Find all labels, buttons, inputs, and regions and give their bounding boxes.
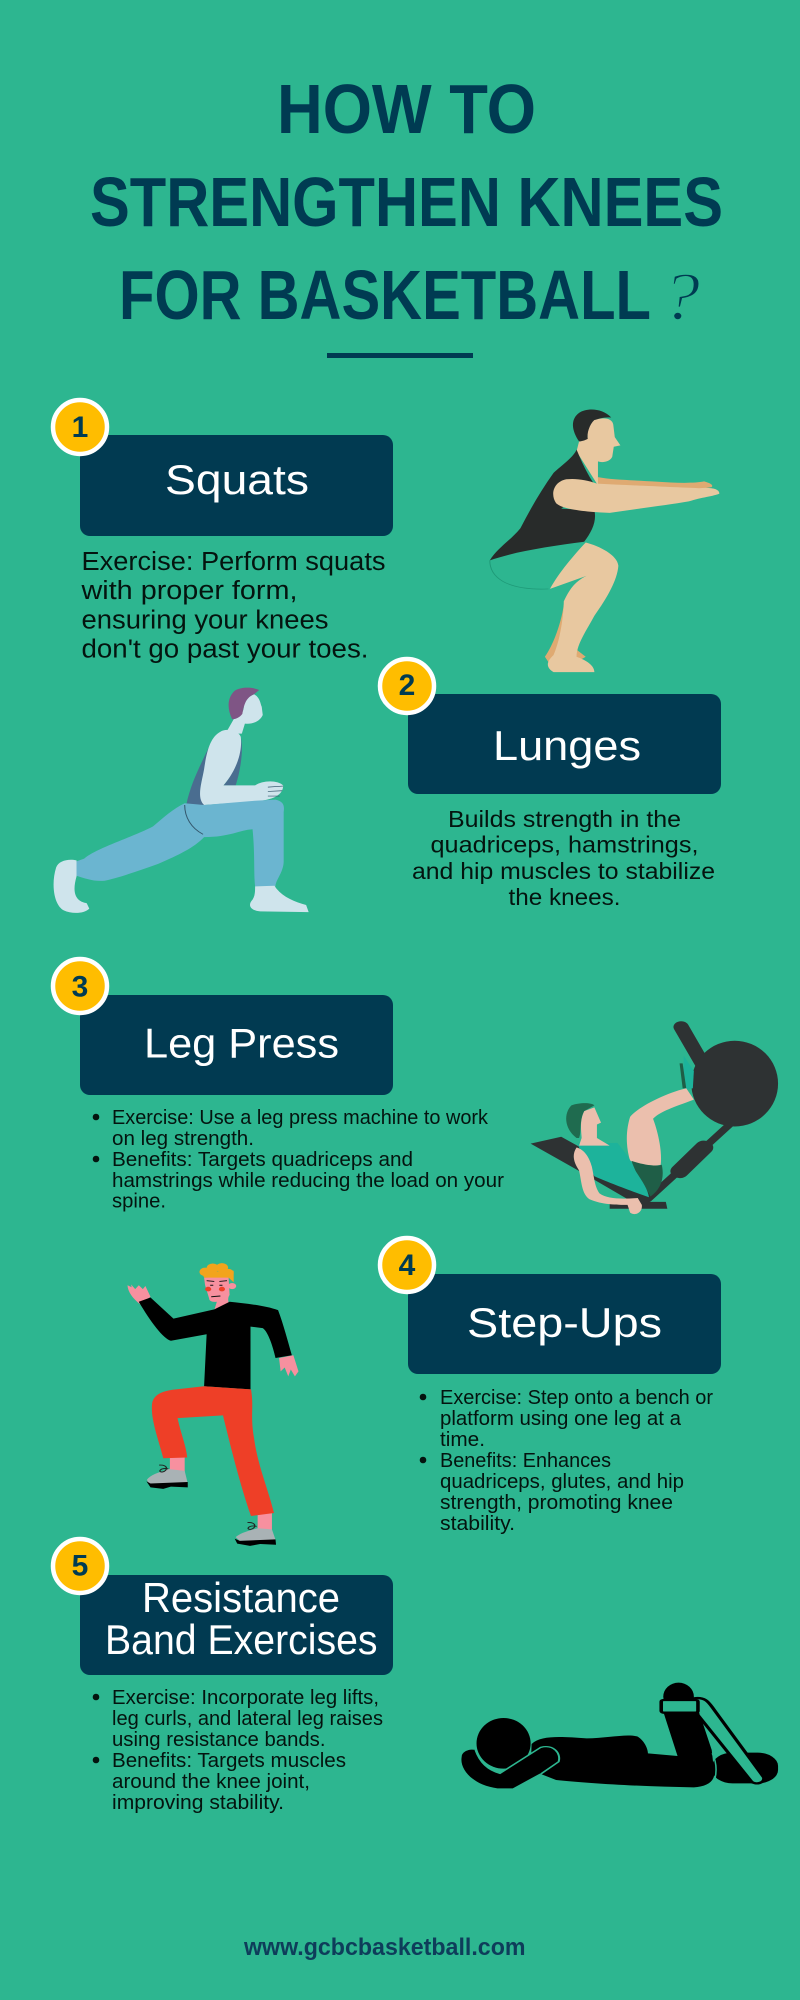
list: leg press details: Exercise: Use a leg press machine to work [112, 1106, 489, 1129]
list: step-ups details: Exercise: Step onto a bench or [440, 1386, 713, 1409]
number badge 3: 3 [72, 970, 88, 1004]
text: squats description: with proper form, [80, 577, 298, 605]
title: HOW TO [277, 70, 536, 148]
number badge 3 [53, 959, 107, 1013]
list: step-ups details: time. [440, 1428, 485, 1451]
text: lunges description [412, 806, 715, 910]
heading box: step-ups: Step-Ups [467, 1299, 662, 1346]
list: step-ups details: stability. [440, 1512, 515, 1535]
list: resistance band details: around the knee joint, [112, 1770, 310, 1793]
text: lunges description: Builds strength in the [448, 806, 681, 832]
list: leg press details: spine. [112, 1190, 166, 1212]
section 4: step-ups [380, 1238, 721, 1535]
heading box: step-ups [408, 1274, 721, 1374]
title: FOR BASKETBALL [119, 256, 651, 334]
list: resistance band details [93, 1686, 383, 1814]
number badge 4 [380, 1238, 434, 1292]
list: step-ups details: quadriceps, glutes, and hip [440, 1470, 684, 1493]
heading box: leg press: Leg Press [144, 1020, 339, 1066]
title [90, 70, 723, 334]
list: leg press details [93, 1106, 504, 1212]
list: step-ups details: strength, promoting knee [440, 1491, 673, 1514]
list: leg press details: hamstrings while reducing the load on your [112, 1169, 504, 1192]
list: step-ups details [420, 1386, 713, 1535]
heading box: lunges [408, 694, 721, 794]
text: squats description [80, 548, 385, 664]
heading box: leg press [80, 995, 393, 1095]
number badge 1: 1 [72, 411, 88, 444]
illustration: man squatting [490, 410, 719, 672]
number badge 1 [53, 400, 107, 454]
number badge 2 [380, 659, 434, 713]
number badge 5 [53, 1539, 107, 1593]
section 1: squats [53, 400, 393, 664]
text: squats description: Exercise: Perform squats [82, 548, 386, 576]
list: resistance band details: leg curls, and lateral leg raises [112, 1707, 383, 1730]
list: resistance band details: improving stability. [112, 1791, 284, 1814]
illustration: man lunging [54, 688, 309, 913]
number badge 5: 5 [72, 1550, 88, 1582]
text: squats description: don't go past your toes. [82, 636, 368, 664]
text: lunges description: and hip muscles to stabilize [412, 858, 715, 884]
list: step-ups details: Benefits: Enhances [440, 1449, 611, 1472]
text: lunges description: quadriceps, hamstrings, [430, 832, 698, 858]
heading box: lunges: Lunges [493, 722, 641, 769]
list: resistance band details: using resistance bands. [112, 1728, 326, 1751]
heading box: squats: Squats [165, 456, 309, 503]
number badge 2: 2 [399, 669, 415, 702]
section 2: lunges [380, 659, 721, 910]
text: squats description: ensuring your knees [82, 606, 328, 634]
illustration: man stepping up [128, 1263, 298, 1546]
heading box: squats [80, 435, 393, 536]
heading box: resistance band exercises: Resistance [142, 1574, 340, 1621]
list: resistance band details: Exercise: Incorporate leg lifts, [112, 1686, 379, 1709]
section 3: leg press [53, 959, 504, 1212]
section 5: resistance band exercises [53, 1539, 393, 1814]
list: step-ups details: platform using one leg at a [440, 1407, 682, 1430]
heading box: resistance band exercises: Band Exercises [105, 1616, 378, 1663]
illustration: person on leg press machine [531, 1027, 778, 1214]
number badge 4: 4 [399, 1249, 416, 1282]
illustration: person lying with resistance band [461, 1683, 778, 1788]
list: resistance band details: Benefits: Targets muscles [112, 1749, 346, 1772]
list: leg press details: Benefits: Targets quadriceps and [112, 1148, 413, 1171]
heading box: resistance band exercises [80, 1574, 393, 1675]
text: lunges description: the knees. [508, 884, 620, 910]
footer: website: www.gcbcbasketball.com [243, 1934, 526, 1961]
list: leg press details: on leg strength. [112, 1127, 254, 1150]
title: ? [662, 258, 700, 334]
